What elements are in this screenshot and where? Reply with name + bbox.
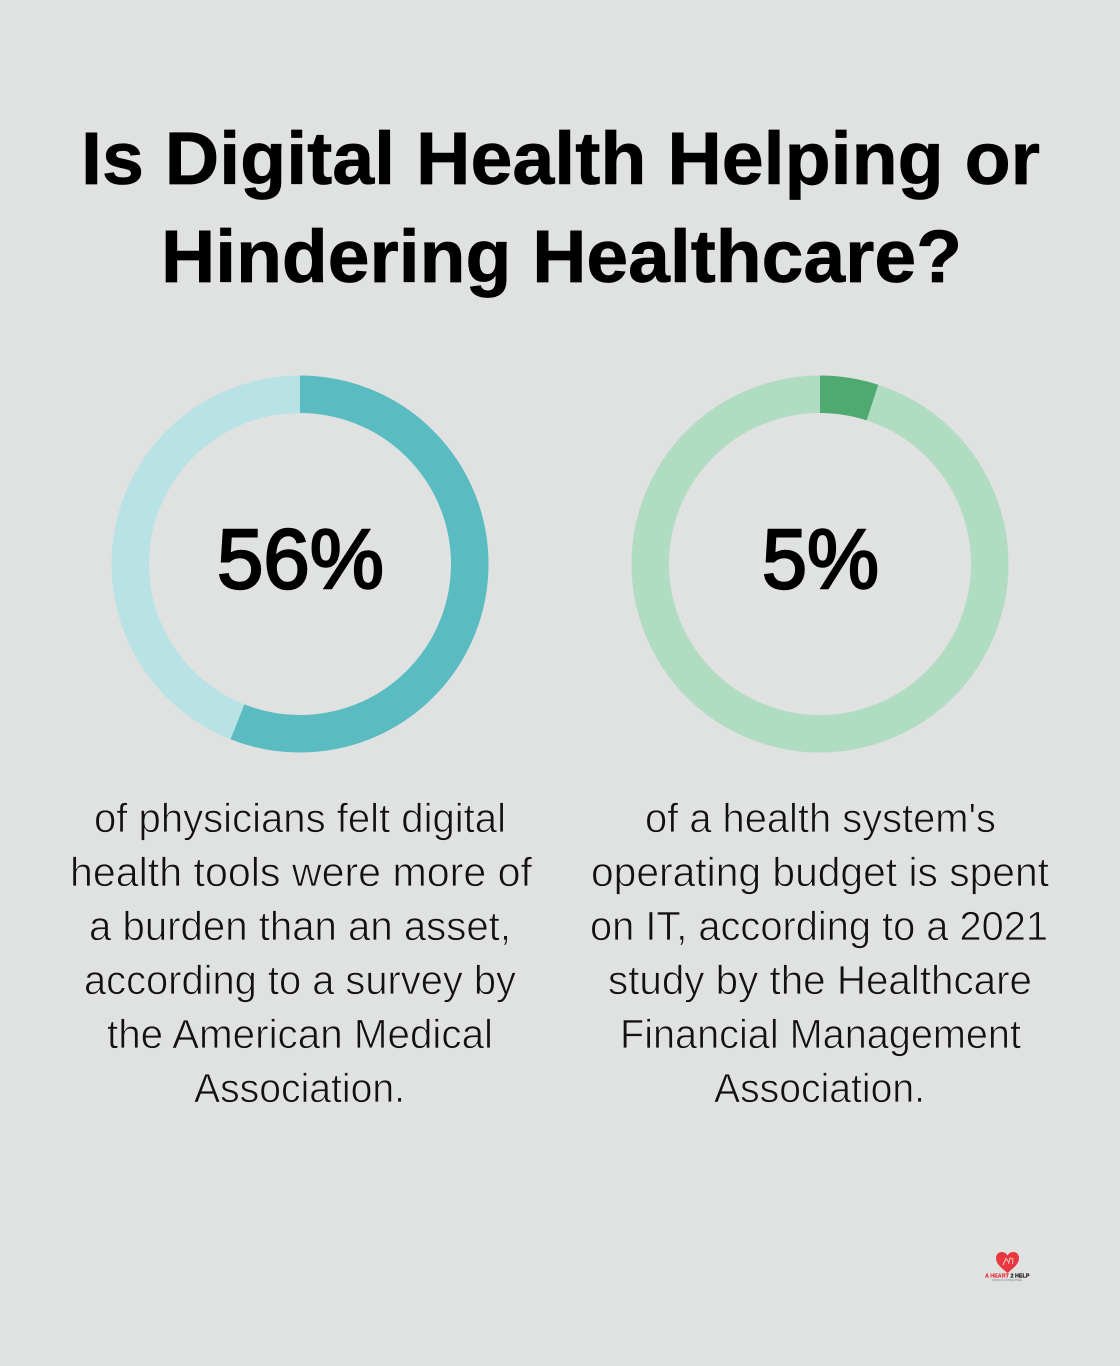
text block: IT budget description: operating budget is spent (591, 849, 1050, 895)
title (81, 117, 1040, 298)
text block: IT budget description: study by the Healthcare (608, 957, 1032, 1003)
text block: IT budget description: Association. (714, 1065, 925, 1111)
text block: physicians description: Association. (194, 1065, 405, 1111)
logo tagline: TECHNOLOGY AND HEALTHCARE (992, 1279, 1022, 1282)
icon: A Heart 2 Help logo (985, 1252, 1030, 1282)
text block: physicians description: according to a survey by (84, 957, 516, 1003)
text block: IT budget description (590, 795, 1050, 1111)
text block: IT budget description: on IT, according to a 2021 (590, 903, 1048, 949)
text block: physicians description: the American Medical (107, 1011, 493, 1057)
donut chart: 5% (650, 394, 990, 734)
text block: physicians description: of physicians felt digital (94, 795, 506, 841)
icon: heart (996, 1252, 1019, 1273)
title: Is Digital Health Helping or (81, 117, 1040, 200)
text block: IT budget description: of a health system's (645, 795, 996, 841)
title: Hindering Healthcare? (161, 215, 962, 298)
panel: 56% physicians (70, 394, 533, 1111)
text block: physicians description (70, 795, 533, 1111)
stat value: 56%: 56% (217, 512, 384, 606)
text block: IT budget description: Financial Management (620, 1011, 1022, 1057)
donut chart: 56% (130, 394, 470, 734)
panel: 5% IT budget (590, 394, 1050, 1111)
logo wordmark: A HEART 2 HELP (985, 1274, 1030, 1280)
text block: physicians description: a burden than an asset, (89, 903, 511, 949)
stat value: 5%: 5% (762, 512, 879, 606)
text block: physicians description: health tools were more of (70, 849, 533, 895)
